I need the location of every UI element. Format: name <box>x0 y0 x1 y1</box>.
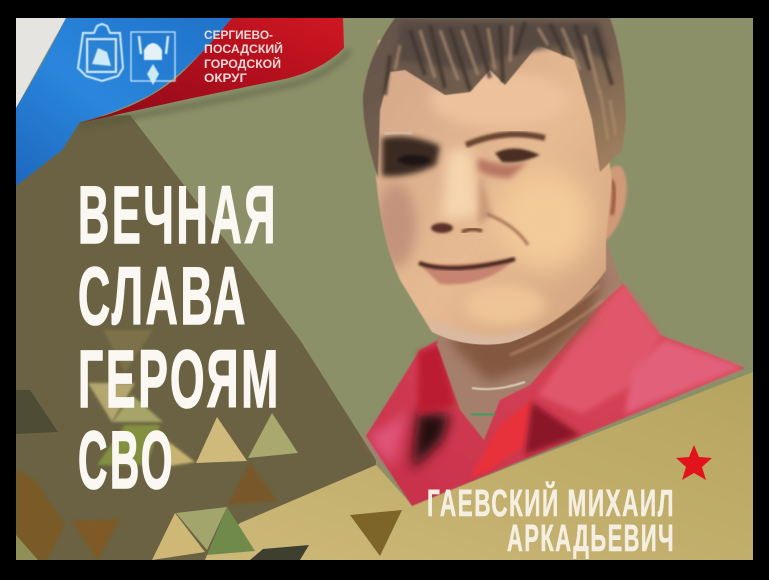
face shading <box>376 72 593 349</box>
dark triangle <box>250 545 309 560</box>
district name: СЕРГИЕВО- <box>204 28 273 42</box>
shirt <box>366 283 745 506</box>
main heading: ВЕЧНАЯ <box>78 170 278 261</box>
left nostril <box>431 223 453 233</box>
brown triangle <box>350 510 402 556</box>
right eye shadow <box>478 158 530 178</box>
blue flag stripe <box>16 18 232 186</box>
left cheek shadow <box>376 183 416 267</box>
right eye <box>495 148 540 162</box>
green triangle <box>207 507 255 555</box>
main heading <box>78 170 281 506</box>
dark camouflage triangle panel <box>16 115 376 560</box>
left eye socket <box>382 136 440 176</box>
main heading: СЛАВА <box>78 251 248 342</box>
district name: ПОСАДСКИЙ <box>204 41 283 56</box>
lip line <box>419 259 515 268</box>
left eye <box>398 155 430 165</box>
ribbon shadow <box>80 50 350 126</box>
red flag stripe <box>80 18 344 123</box>
main heading: ГЕРОЯМ <box>78 334 281 425</box>
smile crease <box>487 214 528 245</box>
neck <box>437 240 622 440</box>
left brow light <box>384 132 412 134</box>
right brow <box>466 134 545 145</box>
district name: ОКРУГ <box>204 71 247 85</box>
nose side shadow <box>478 170 492 225</box>
district coat of arms <box>131 32 175 85</box>
regional coat of arms <box>78 24 123 81</box>
dark hair strands <box>385 22 612 95</box>
green pendant <box>471 414 495 415</box>
lower right face highlight <box>465 285 545 325</box>
portrait photo <box>363 18 745 506</box>
necklace <box>472 382 525 389</box>
light hair strands <box>395 26 616 140</box>
ear <box>602 166 627 242</box>
hero name <box>427 480 675 560</box>
hair <box>363 18 626 178</box>
hair shading <box>395 22 610 70</box>
white flag stripe <box>16 18 66 108</box>
mouth <box>418 259 515 284</box>
main heading: СВО <box>78 415 175 506</box>
face <box>376 30 612 344</box>
right cheek highlight <box>497 170 593 270</box>
icon: red star <box>676 445 712 480</box>
chin beard <box>430 320 538 344</box>
district name: ГОРОДСКОЙ <box>204 56 281 71</box>
nose highlight <box>442 150 478 220</box>
district name <box>204 28 283 85</box>
right nostril <box>462 229 482 232</box>
camouflage triangle pattern <box>16 330 298 560</box>
neck creases <box>510 284 604 356</box>
tan lower panel <box>205 372 753 560</box>
forehead highlight <box>430 74 564 126</box>
